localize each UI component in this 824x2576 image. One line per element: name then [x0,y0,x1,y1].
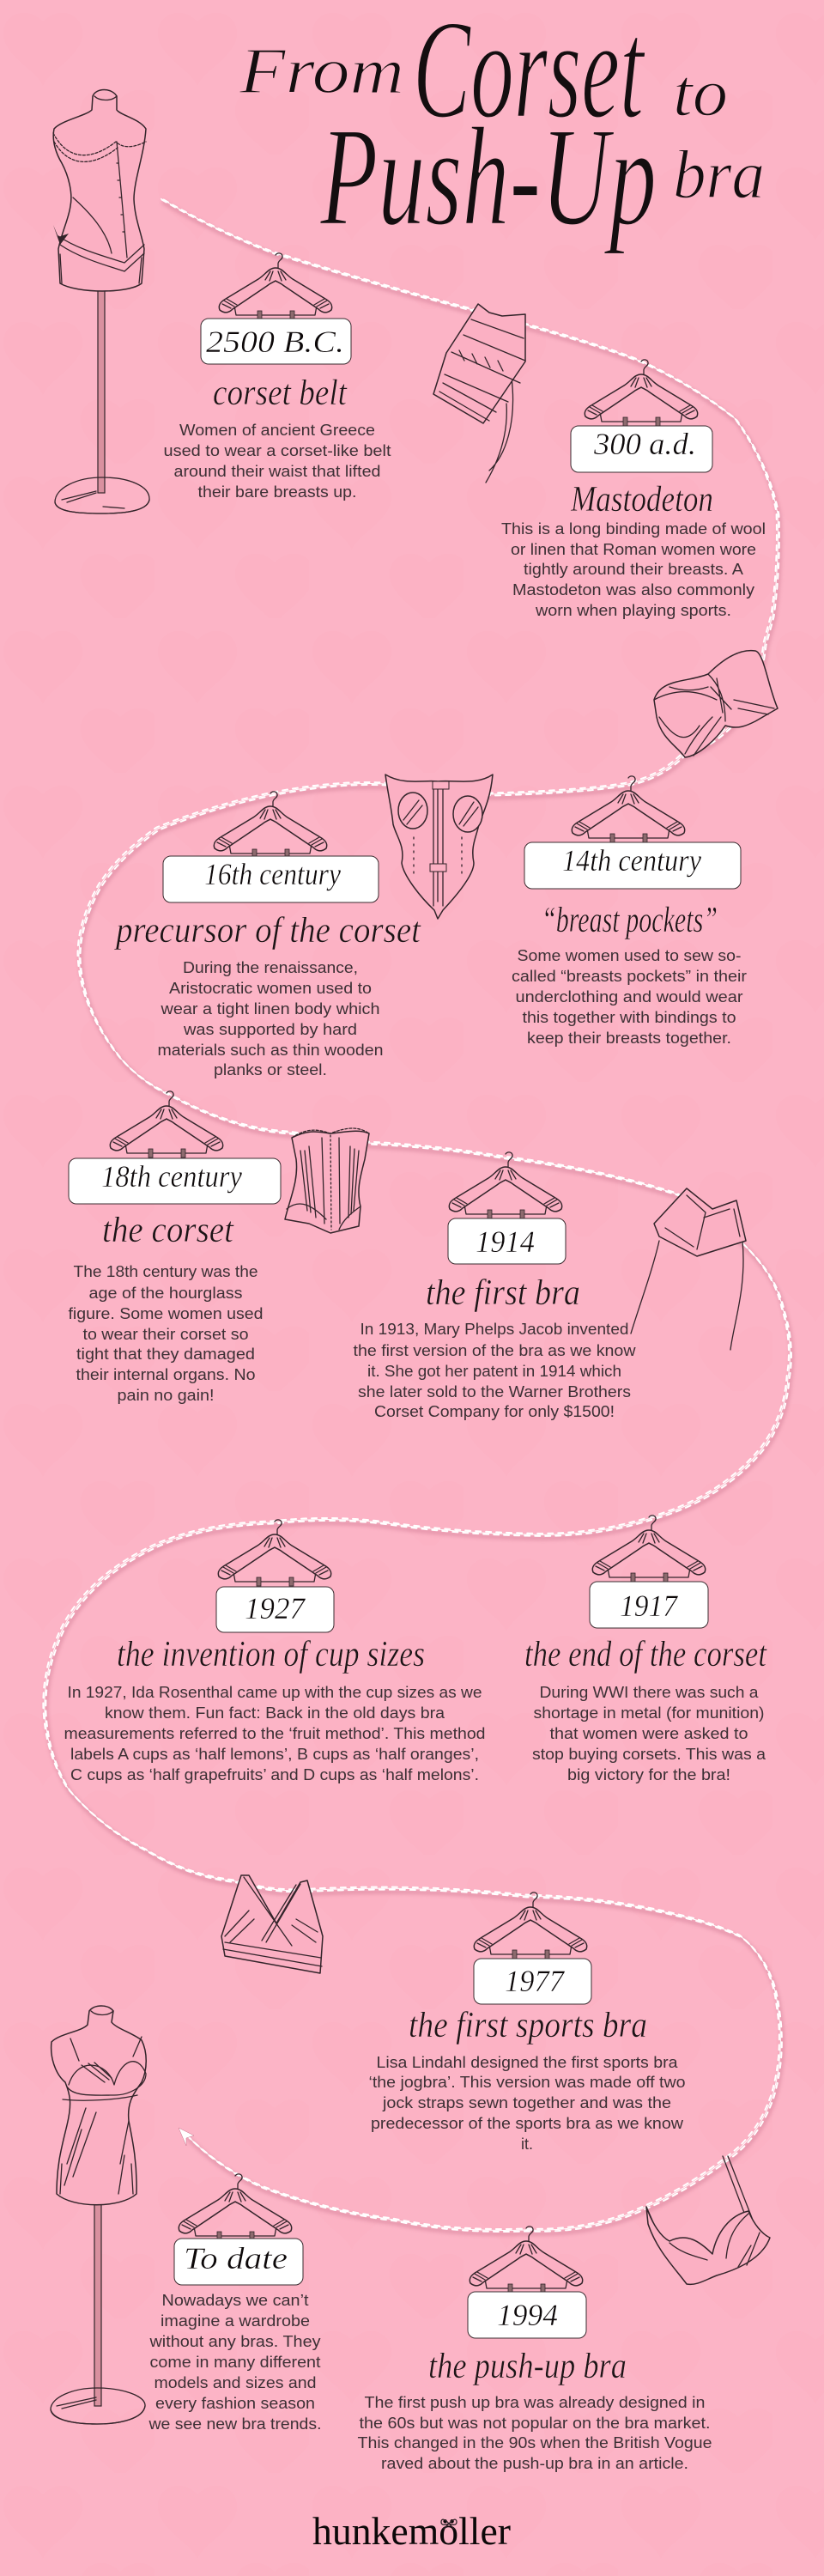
text: push-up bra body [357,2394,712,2472]
text: Mastodeton body: worn when playing sports. [535,602,731,619]
panel: 1917 [524,1516,767,1783]
text: to date body: without any bras. They [148,2333,321,2350]
arrow head [179,2128,194,2146]
heading: the first sports bra: the first sports bra [409,2006,647,2045]
icon: corset belt [433,304,525,483]
sign: 1977 [474,1959,591,2004]
panel: 300 a.d. [501,360,766,619]
text: first bra body: Corset Company for only $1500! [374,1403,615,1420]
text: corset belt body [163,422,391,501]
text: breast pockets body: Some women used to sew so- [517,947,742,964]
text: Mastodeton body: or linen that Roman women wore [511,541,756,558]
text: end of corset body: During WWI there was such a [539,1684,760,1701]
text: cup sizes body: C cups as ‘half grapefruits’ and D cups as ‘half melons’. [70,1766,479,1783]
text: the corset body: pain no gain! [117,1387,215,1404]
panel: 1914: 1914 [476,1224,535,1259]
text: Mastodeton body: Mastodeton was also commonly [512,581,754,598]
text: cup sizes body: labels A cups as ‘half lemons’, B cups as ‘half oranges’, [70,1746,479,1763]
panel: 1994 [357,2227,712,2472]
text: breast pockets body [512,947,747,1047]
panel: 2500 B.C.: 2500 B.C. [206,325,344,359]
text: breast pockets body: called “breasts pockets” in their [512,968,747,985]
panel: 14th century: 14th century [562,843,701,878]
title: bra [673,137,765,213]
text: Mastodeton body: tightly around their breasts. A [524,561,743,578]
sign: 1927 [216,1587,334,1632]
panel: 18th century: 18th century [101,1159,242,1194]
text: precursor body: materials such as thin wooden [158,1042,383,1059]
title: Push-Up [319,98,657,255]
text: to date body: we see new bra trends. [148,2415,321,2433]
heading: precursor of the corset: precursor of the corset [113,911,421,951]
heading: the corset: the corset [102,1211,234,1250]
text: breast pockets body: underclothing and would wear [515,988,743,1005]
text: cup sizes body: measurements referred to the ‘fruit method’. This method [64,1725,486,1742]
text: the corset body: their internal organs. No [76,1366,256,1383]
sign: 1994 [468,2292,586,2338]
text: the corset body: tight that they damaged [76,1346,255,1363]
text: the corset body: to wear their corset so [82,1326,249,1343]
panel: 1977: 1977 [505,1964,566,1998]
text: to date body: Nowadays we can’t [161,2292,309,2309]
text: push-up bra body: This changed in the 90s when the British Vogue [357,2434,712,2451]
text: cup sizes body [64,1684,486,1783]
panel: 1994: 1994 [497,2298,558,2332]
text: sports bra body: predecessor of the sports bra as we know [371,2115,684,2132]
sign: 2500 B.C. [201,319,351,364]
heading: the first bra: the first bra [426,1273,580,1313]
text: the corset body: The 18th century was the [74,1263,258,1280]
panel: 1927: 1927 [245,1591,306,1625]
icon: corset mannequin [53,89,149,513]
text: the corset body: figure. Some women used [69,1305,263,1322]
text: end of corset body: big victory for the bra! [567,1766,730,1783]
text: first bra body [354,1321,637,1420]
sign: 16th century [163,856,379,902]
text: sports bra body: Lisa Lindahl designed the first sports bra [376,2054,679,2071]
title [239,0,765,255]
title: to [673,55,728,130]
text: corset belt body: used to wear a corset-like belt [163,442,391,459]
text: corset belt body: their bare breasts up. [197,483,357,501]
icon: 18th century corset [285,1128,369,1233]
panel: 1977 [369,1893,685,2153]
panel: 18th century [69,1091,281,1404]
text: to date body: come in many different [149,2354,321,2371]
panel: 2500 B.C. [163,253,391,501]
text: precursor body: wear a tight linen body which [160,1000,379,1018]
sign: 14th century [524,842,741,889]
text: cup sizes body: know them. Fun fact: Back in the old days bra [105,1704,445,1722]
text: end of corset body: stop buying corsets. This was a [532,1746,766,1763]
text: the corset body [69,1263,263,1404]
text: end of corset body: that women were asked to [549,1725,748,1742]
text: Mastodeton body: This is a long binding made of wool [501,520,766,538]
panel: 1914 [354,1152,637,1420]
text: precursor body: Aristocratic women used to [169,980,372,997]
panel: 16th century: 16th century [204,857,341,891]
panel: to date [148,2174,321,2433]
sign: 18th century [69,1158,281,1204]
panel: 300 a.d.: 300 a.d. [593,427,696,461]
icon: push-up bra [646,2156,770,2284]
icon: bra mannequin [51,2006,146,2424]
sign: 300 a.d. [571,426,712,472]
text: to date body: every fashion season [155,2395,315,2412]
logo: hunkemöller: hunkemöller [312,2509,511,2553]
text: push-up bra body: The first push up bra was already designed in [364,2394,706,2411]
text: to date body: imagine a wardrobe [161,2312,310,2330]
text: precursor body [158,959,383,1078]
text: end of corset body [532,1684,766,1783]
panel: 1927 [64,1520,486,1783]
heading: the end of the corset: the end of the corset [524,1635,767,1674]
text: to date body [148,2292,321,2433]
text: corset belt body: around their waist that lifted [173,463,381,480]
icon: logo bow [441,2519,457,2529]
text: precursor body: planks or steel. [214,1061,327,1078]
heading: breast pockets: “breast pockets” [542,901,718,940]
icon: linen body corset [385,775,493,919]
text: sports bra body: ‘the jogbra’. This version was made off two [369,2074,685,2091]
text: first bra body: she later sold to the Warner Brothers [358,1383,631,1400]
text: breast pockets body: this together with bindings to [522,1009,736,1026]
text: push-up bra body: raved about the push-up bra in an article. [381,2455,688,2472]
icon: mastodeton wrap [654,651,778,757]
heading: the invention of cup sizes: the invention of cup sizes [117,1635,425,1674]
text: sports bra body [369,2054,685,2153]
panel: 1917: 1917 [620,1589,679,1623]
icon: sports bra [221,1875,323,1973]
panel: to date: To date [184,2241,288,2275]
text: sports bra body: it. [521,2136,533,2153]
text: first bra body: In 1913, Mary Phelps Jacob invented [360,1321,628,1338]
text: first bra body: it. She got her patent in 1914 which [367,1363,621,1380]
text: end of corset body: shortage in metal (for munition) [534,1704,764,1722]
sign: 1917 [590,1582,708,1628]
text: to date body: models and sizes and [154,2374,316,2391]
icon: first bra [631,1188,746,1350]
text: Mastodeton body [501,520,766,619]
text: precursor body: During the renaissance, [183,959,358,976]
text: first bra body: the first version of the bra as we know [354,1342,637,1359]
sign: 1914 [448,1218,566,1264]
text: the corset body: age of the hourglass [89,1285,242,1302]
text: corset belt body: Women of ancient Greece [179,422,375,439]
text: cup sizes body: In 1927, Ida Rosenthal came up with the cup sizes as we [67,1684,482,1701]
text: sports bra body: jock straps sewn together and was the [382,2094,671,2111]
heading: the push-up bra: the push-up bra [428,2347,627,2386]
text: breast pockets body: keep their breasts together. [527,1030,731,1047]
sign: to date [174,2239,303,2285]
rope timeline [43,197,791,2234]
heading: Mastodeton: Mastodeton [570,480,713,519]
panel: 14th century [512,776,747,1047]
heading: corset belt: corset belt [213,374,348,413]
panel: 16th century [113,792,421,1078]
text: push-up bra body: the 60s but was not popular on the bra market. [359,2415,711,2432]
title: From [239,35,404,107]
text: precursor body: was supported by hard [183,1021,357,1038]
